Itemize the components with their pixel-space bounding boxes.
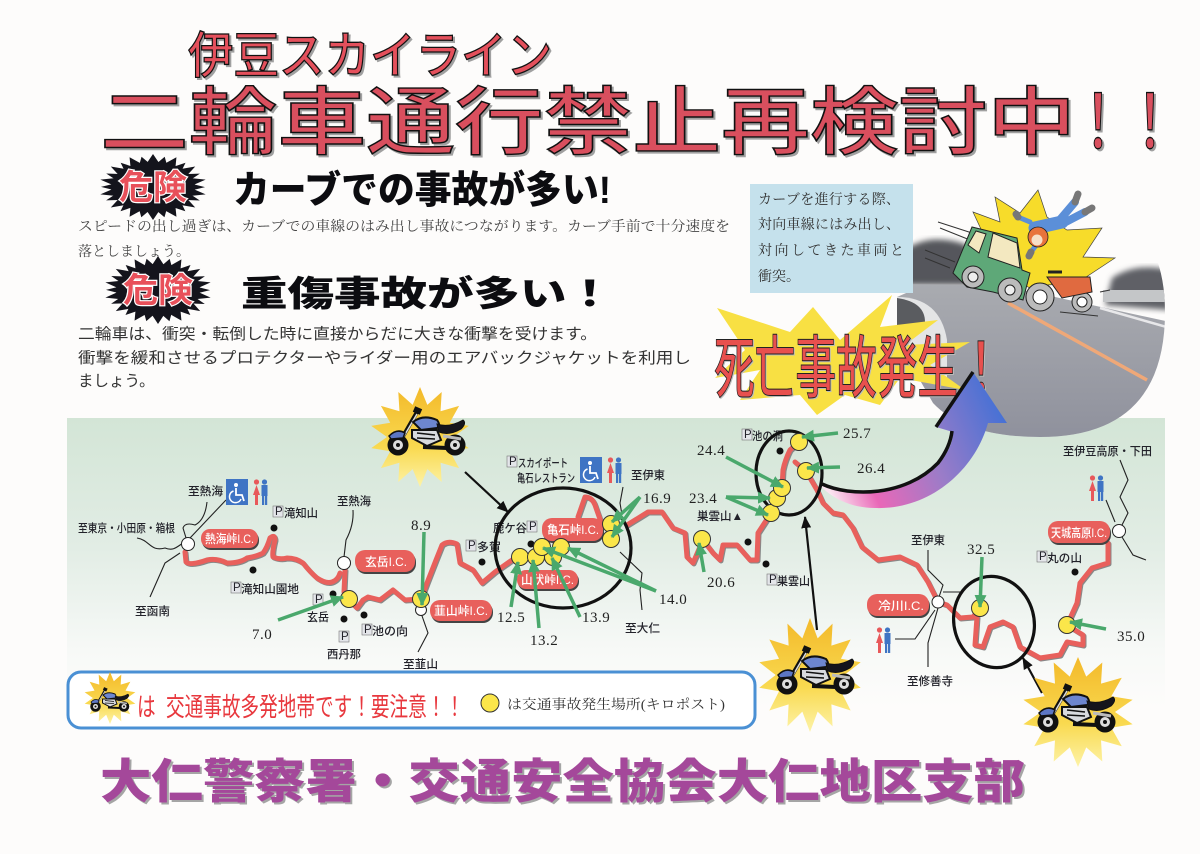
expressway route — [185, 442, 1108, 658]
footer: police and traffic safety association: 大仁警察署・交通安全協会大仁地区支部 — [100, 755, 1025, 808]
body text: speed — [78, 218, 730, 260]
flying rider — [1016, 194, 1092, 256]
green car — [953, 227, 1030, 302]
map place labels: 丸の山 — [1047, 552, 1082, 565]
explosion star — [973, 190, 1115, 290]
motorcycle burst 1 — [371, 387, 469, 487]
interchange label: Nirayama Pass — [430, 600, 493, 623]
body text: protectors: 衝撃を緩和させるプロテクターやライダー用のエアバックジャケットを利用し — [78, 349, 691, 367]
interchange label: Yamabushi Pass: 山伏峠I.C. — [521, 572, 574, 587]
map place labels: 亀石レストラン — [517, 471, 575, 485]
map place labels: 玄岳 — [307, 611, 329, 624]
interchange label: Atami Pass — [201, 529, 259, 550]
body text: speed: 落としましょう。 — [78, 244, 190, 260]
fatal accident text: 死亡事故発生 — [714, 331, 958, 407]
kilometre numbers: 35.0 — [1117, 629, 1145, 645]
map place labels: 至東京・小田原・箱根 — [78, 521, 175, 535]
map place labels: 巣雲山 — [777, 574, 810, 588]
side roads — [137, 460, 1146, 667]
curved arrow to photo — [820, 372, 1007, 508]
callout: curve explanation: 対向してきた車両と — [758, 242, 904, 259]
legend text: accident locations: は交通事故発生場所(キロポスト) — [507, 696, 725, 712]
map place labels: P — [529, 521, 537, 533]
map place labels: P — [744, 429, 752, 441]
kilometre numbers: 32.5 — [967, 542, 995, 558]
map place labels: 滝知山園地 — [241, 582, 300, 596]
map place labels: P — [233, 582, 241, 594]
kilometre numbers: 7.0 — [252, 627, 272, 643]
map place labels: 至伊東 — [911, 533, 945, 547]
map place labels: 至伊豆高原・下田 — [1063, 444, 1152, 458]
motorcycle burst 2 — [759, 618, 861, 732]
kilometre numbers: 13.9 — [582, 610, 610, 626]
danger badge 1 — [92, 150, 214, 224]
motorcycle burst 3 — [1023, 657, 1133, 767]
legend yellow dot — [481, 694, 499, 712]
interchange label: Gendake: 玄岳I.C. — [365, 554, 407, 569]
map place labels: P — [364, 624, 372, 636]
parking dots — [250, 448, 1078, 622]
interchange label: Gendake — [355, 550, 416, 574]
map place labels: P — [1039, 551, 1047, 563]
legend box — [68, 672, 755, 728]
callout: curve explanation: 衝突。 — [758, 268, 800, 285]
map place labels: 池の洞 — [752, 429, 783, 443]
callout: curve explanation: 対向車線にはみ出し、 — [758, 216, 900, 233]
callout: curve explanation — [750, 184, 913, 293]
interchange label: Amagi Kogen — [1048, 521, 1111, 545]
kilometre numbers: 14.0 — [659, 592, 687, 608]
accident kilometre-post dots — [340, 434, 1076, 634]
interchange label: Nirayama Pass: 韮山峠I.C. — [434, 603, 488, 618]
kilometre numbers: 12.5 — [497, 610, 525, 626]
fatal accident text: ！ — [958, 331, 1004, 407]
facility icons — [226, 457, 1104, 653]
map place labels: 至修善寺 — [907, 674, 953, 688]
danger badge 1: 危険 — [119, 169, 187, 207]
interchange label: Kameishi Pass — [542, 518, 604, 543]
body text: protectors — [78, 325, 691, 390]
interchange label: Yamabushi Pass — [517, 570, 579, 591]
map place labels: 至熱海 — [188, 484, 224, 498]
speed lines — [925, 222, 1110, 316]
map place labels: 西丹那 — [327, 648, 361, 661]
kilometre numbers: 13.2 — [530, 633, 558, 649]
body text: protectors: 二輪車は、衝突・転倒した時に直接からだに大きな衝撃を受けます。 — [78, 325, 597, 343]
map place labels: 至函南 — [135, 604, 170, 618]
interchange label: Atami Pass: 熱海峠I.C. — [205, 531, 254, 546]
interchange label: Amagi Kogen: 天城高原I.C. — [1051, 525, 1107, 540]
map background — [67, 418, 1165, 708]
danger badge 2 — [97, 252, 219, 328]
map place labels: 至伊東 — [631, 468, 665, 482]
junction circles — [182, 524, 1126, 616]
kilometre numbers — [252, 426, 1145, 649]
map place labels: 滝知山 — [284, 506, 318, 520]
kilometre numbers: 24.4 — [697, 443, 725, 459]
map place labels: 至大仁 — [625, 621, 661, 635]
map place labels: スカイポート — [518, 457, 568, 470]
map place labels: P — [341, 631, 349, 643]
legend text: accident black spots: は 交通事故多発地帯です！要注意！！ — [137, 692, 464, 722]
heading: accidents on curves: カーブでの事故が多い! — [233, 169, 611, 212]
crash photo illustration — [897, 189, 1165, 437]
map place labels: P — [275, 506, 283, 518]
map place labels: P — [509, 456, 517, 468]
map place labels: 巣雲山▲ — [697, 509, 743, 523]
body text: speed: スピードの出し過ぎは、カーブでの車線のはみ出し事故につながります。カーブ手前で十分速度を — [78, 218, 730, 235]
kilometre numbers: 26.4 — [857, 461, 885, 477]
subtitle: Izu Skyline: 伊豆スカイライン — [188, 28, 552, 84]
green kilometre arrows — [278, 433, 1106, 629]
kilometre numbers: 20.6 — [707, 575, 735, 591]
kilometre numbers: 16.9 — [643, 491, 671, 507]
kilometre numbers: 8.9 — [411, 518, 431, 534]
fatal accident burst — [715, 295, 970, 415]
motorcycle — [1026, 272, 1092, 312]
map place labels: P — [315, 594, 323, 606]
main title: 二輪車通行禁止再検討中 — [100, 81, 1076, 164]
high-accident zone rings — [495, 431, 1045, 677]
map place labels: 至韮山 — [403, 657, 438, 671]
callout: curve explanation: カーブを進行する際、 — [758, 192, 900, 208]
interchange label: Hiekawa — [867, 594, 930, 618]
body text: protectors: ましょう。 — [78, 373, 155, 390]
black pointer arrows — [465, 472, 1042, 693]
interchange label: Kameishi Pass: 亀石峠I.C. — [547, 522, 599, 537]
map place labels: 池の向 — [372, 624, 408, 638]
map place labels: P — [769, 574, 777, 586]
map place labels — [78, 429, 1152, 688]
map place labels: 多賀 — [477, 540, 501, 554]
danger badge 2: 危険 — [123, 272, 193, 310]
kilometre numbers: 23.4 — [689, 491, 717, 507]
kilometre numbers: 25.7 — [843, 426, 871, 442]
interchange label: Hiekawa: 冷川I.C. — [878, 599, 924, 613]
map place labels: P — [468, 540, 476, 552]
map place labels: 至熱海 — [337, 494, 371, 508]
heading: serious injury accidents: 重傷事故が多い！ — [241, 274, 613, 314]
map place labels: 鹿ケ谷 — [493, 521, 527, 535]
legend motorcycle icon — [85, 672, 135, 724]
